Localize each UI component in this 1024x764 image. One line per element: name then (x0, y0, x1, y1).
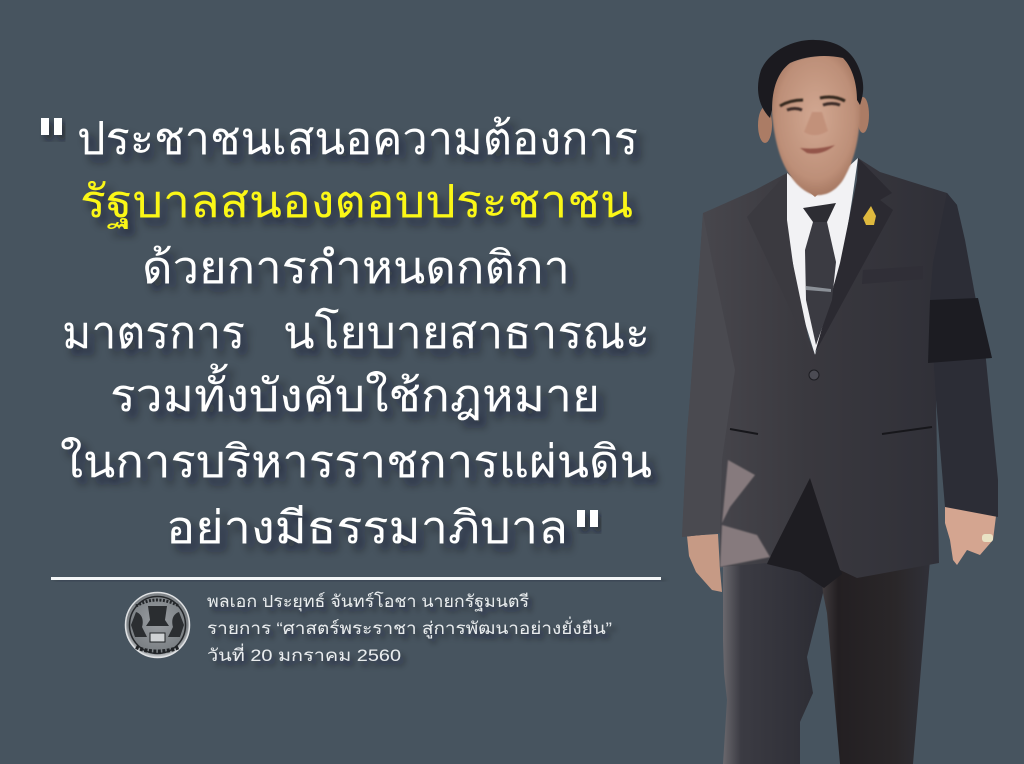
left trouser leg (723, 520, 823, 764)
attribution text (207, 591, 612, 665)
quote line 4: มาตรการ (62, 307, 245, 358)
quote line 6: ในการบริหารราชการแผ่นดิน (60, 436, 652, 487)
right hand (945, 505, 996, 565)
left lapel (747, 173, 812, 355)
speaker name: พลเอก ประยุทธ์ จันทร์โอชา นายกรัฐมนตรี (207, 591, 529, 612)
face (772, 54, 860, 195)
lapel pin (863, 206, 876, 225)
chest pocket (862, 266, 923, 284)
portrait figure (682, 40, 998, 764)
black armband (928, 298, 992, 363)
right lapel (815, 158, 893, 353)
mouth (800, 145, 835, 154)
main quote (60, 113, 652, 553)
quote line 2 highlighted: รัฐบาลสนองตอบประชาชน (80, 176, 633, 229)
opening quotation mark (41, 118, 62, 135)
left sleeve shading (682, 213, 735, 537)
necktie (803, 203, 836, 345)
quote line 4 (62, 307, 650, 358)
right trouser leg (815, 500, 930, 764)
eyebrows (780, 97, 845, 106)
jacket pocket right (882, 427, 932, 434)
tie clip (806, 286, 831, 292)
jacket body (682, 158, 957, 578)
icon: government seal (126, 592, 190, 658)
neck (790, 150, 852, 200)
shirt (786, 158, 858, 355)
jacket button (809, 370, 819, 380)
left hand (687, 534, 722, 592)
quote line 1: ประชาชนเสนอความต้องการ (77, 113, 638, 164)
nose (804, 112, 828, 135)
jacket pocket left (730, 429, 758, 434)
light patches on jacket (720, 460, 770, 567)
quote line 5: รวมทั้งบังคับใช้กฎหมาย (110, 363, 600, 421)
quote line 4: นโยบายสาธารณะ (283, 307, 650, 358)
left ear (758, 107, 772, 143)
ring (982, 534, 993, 542)
eyes (787, 104, 840, 110)
right sleeve (930, 193, 998, 517)
divider rule (51, 577, 661, 580)
programme name: รายการ “ศาสตร์พระราชา สู่การพัฒนาอย่างยั่งยืน” (207, 616, 612, 639)
quote line 7: อย่างมีธรรมาภิบาล (166, 502, 568, 553)
right ear (857, 97, 869, 133)
hair (758, 40, 863, 118)
dark area under jacket (767, 470, 842, 588)
closing quotation mark (577, 510, 598, 527)
quote line 3: ด้วยการกำหนดกติกา (142, 242, 570, 293)
facial features (780, 97, 845, 154)
date: วันที่ 20 มกราคม 2560 (207, 643, 401, 665)
